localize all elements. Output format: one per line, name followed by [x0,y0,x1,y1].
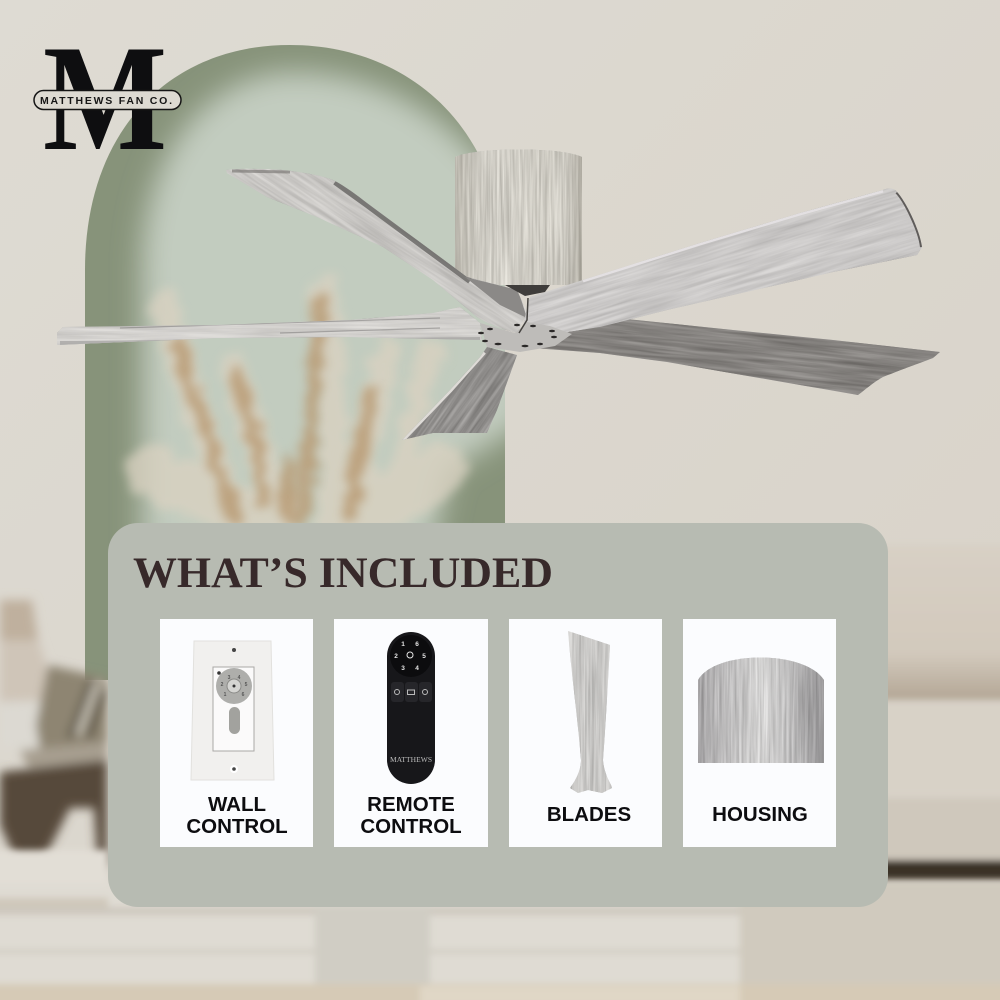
card: remote control [334,619,488,847]
icon: housing [698,658,824,763]
icon: blade [568,631,612,793]
icon: wall control plate: 3 [228,675,231,681]
logo: Matthews Fan Co. [34,14,181,182]
icon: wall control plate [191,641,274,780]
fan blade: upper right [524,188,922,332]
fan housing [455,150,582,285]
icon: remote: 3 [401,665,405,672]
icon: wall control plate: 4 [238,675,241,681]
arched green wall niche [80,40,530,685]
caption: remote control: REMOTE [367,793,455,816]
icon: wall control plate: 6 [242,692,245,698]
icon: remote [387,632,435,784]
fan blade: lower left [402,347,517,440]
caption: remote control: CONTROL [360,815,462,838]
caption: blades: BLADES [547,803,631,826]
icon: wall control plate: 5 [245,682,248,688]
icon: remote: 6 [415,641,419,648]
icon: remote: 5 [422,653,426,660]
logo monogram M: M [43,14,167,182]
floor [0,850,1000,1000]
icon: remote: 1 [401,641,405,648]
card: wall control [160,619,313,847]
caption: wall control: WALL [208,793,266,816]
panel: what's included [108,523,888,907]
icon: remote: 2 [394,653,398,660]
heading: WHAT’S INCLUDED [133,550,553,597]
fan center hub with screws [478,285,572,352]
caption: housing: HOUSING [712,803,808,826]
caption: wall control: CONTROL [186,815,288,838]
icon: wall control plate: 1 [224,692,227,698]
card: housing [683,619,836,847]
logo name pill: MATTHEWS FAN CO. [40,95,172,107]
icon: remote: MATTHEWS [390,755,432,764]
icon: remote: 4 [415,665,419,672]
fan blade: lower right [540,320,940,395]
left armchair with throw [0,600,107,888]
right sofa [880,545,1000,880]
fan blade: upper left [226,168,526,332]
ceiling fan [57,150,940,440]
logo name pill [34,90,181,110]
fan blade: left [57,307,482,345]
icon: wall control plate: 2 [221,682,224,688]
card: blades [509,619,662,847]
pampas grass decoration [150,290,440,525]
